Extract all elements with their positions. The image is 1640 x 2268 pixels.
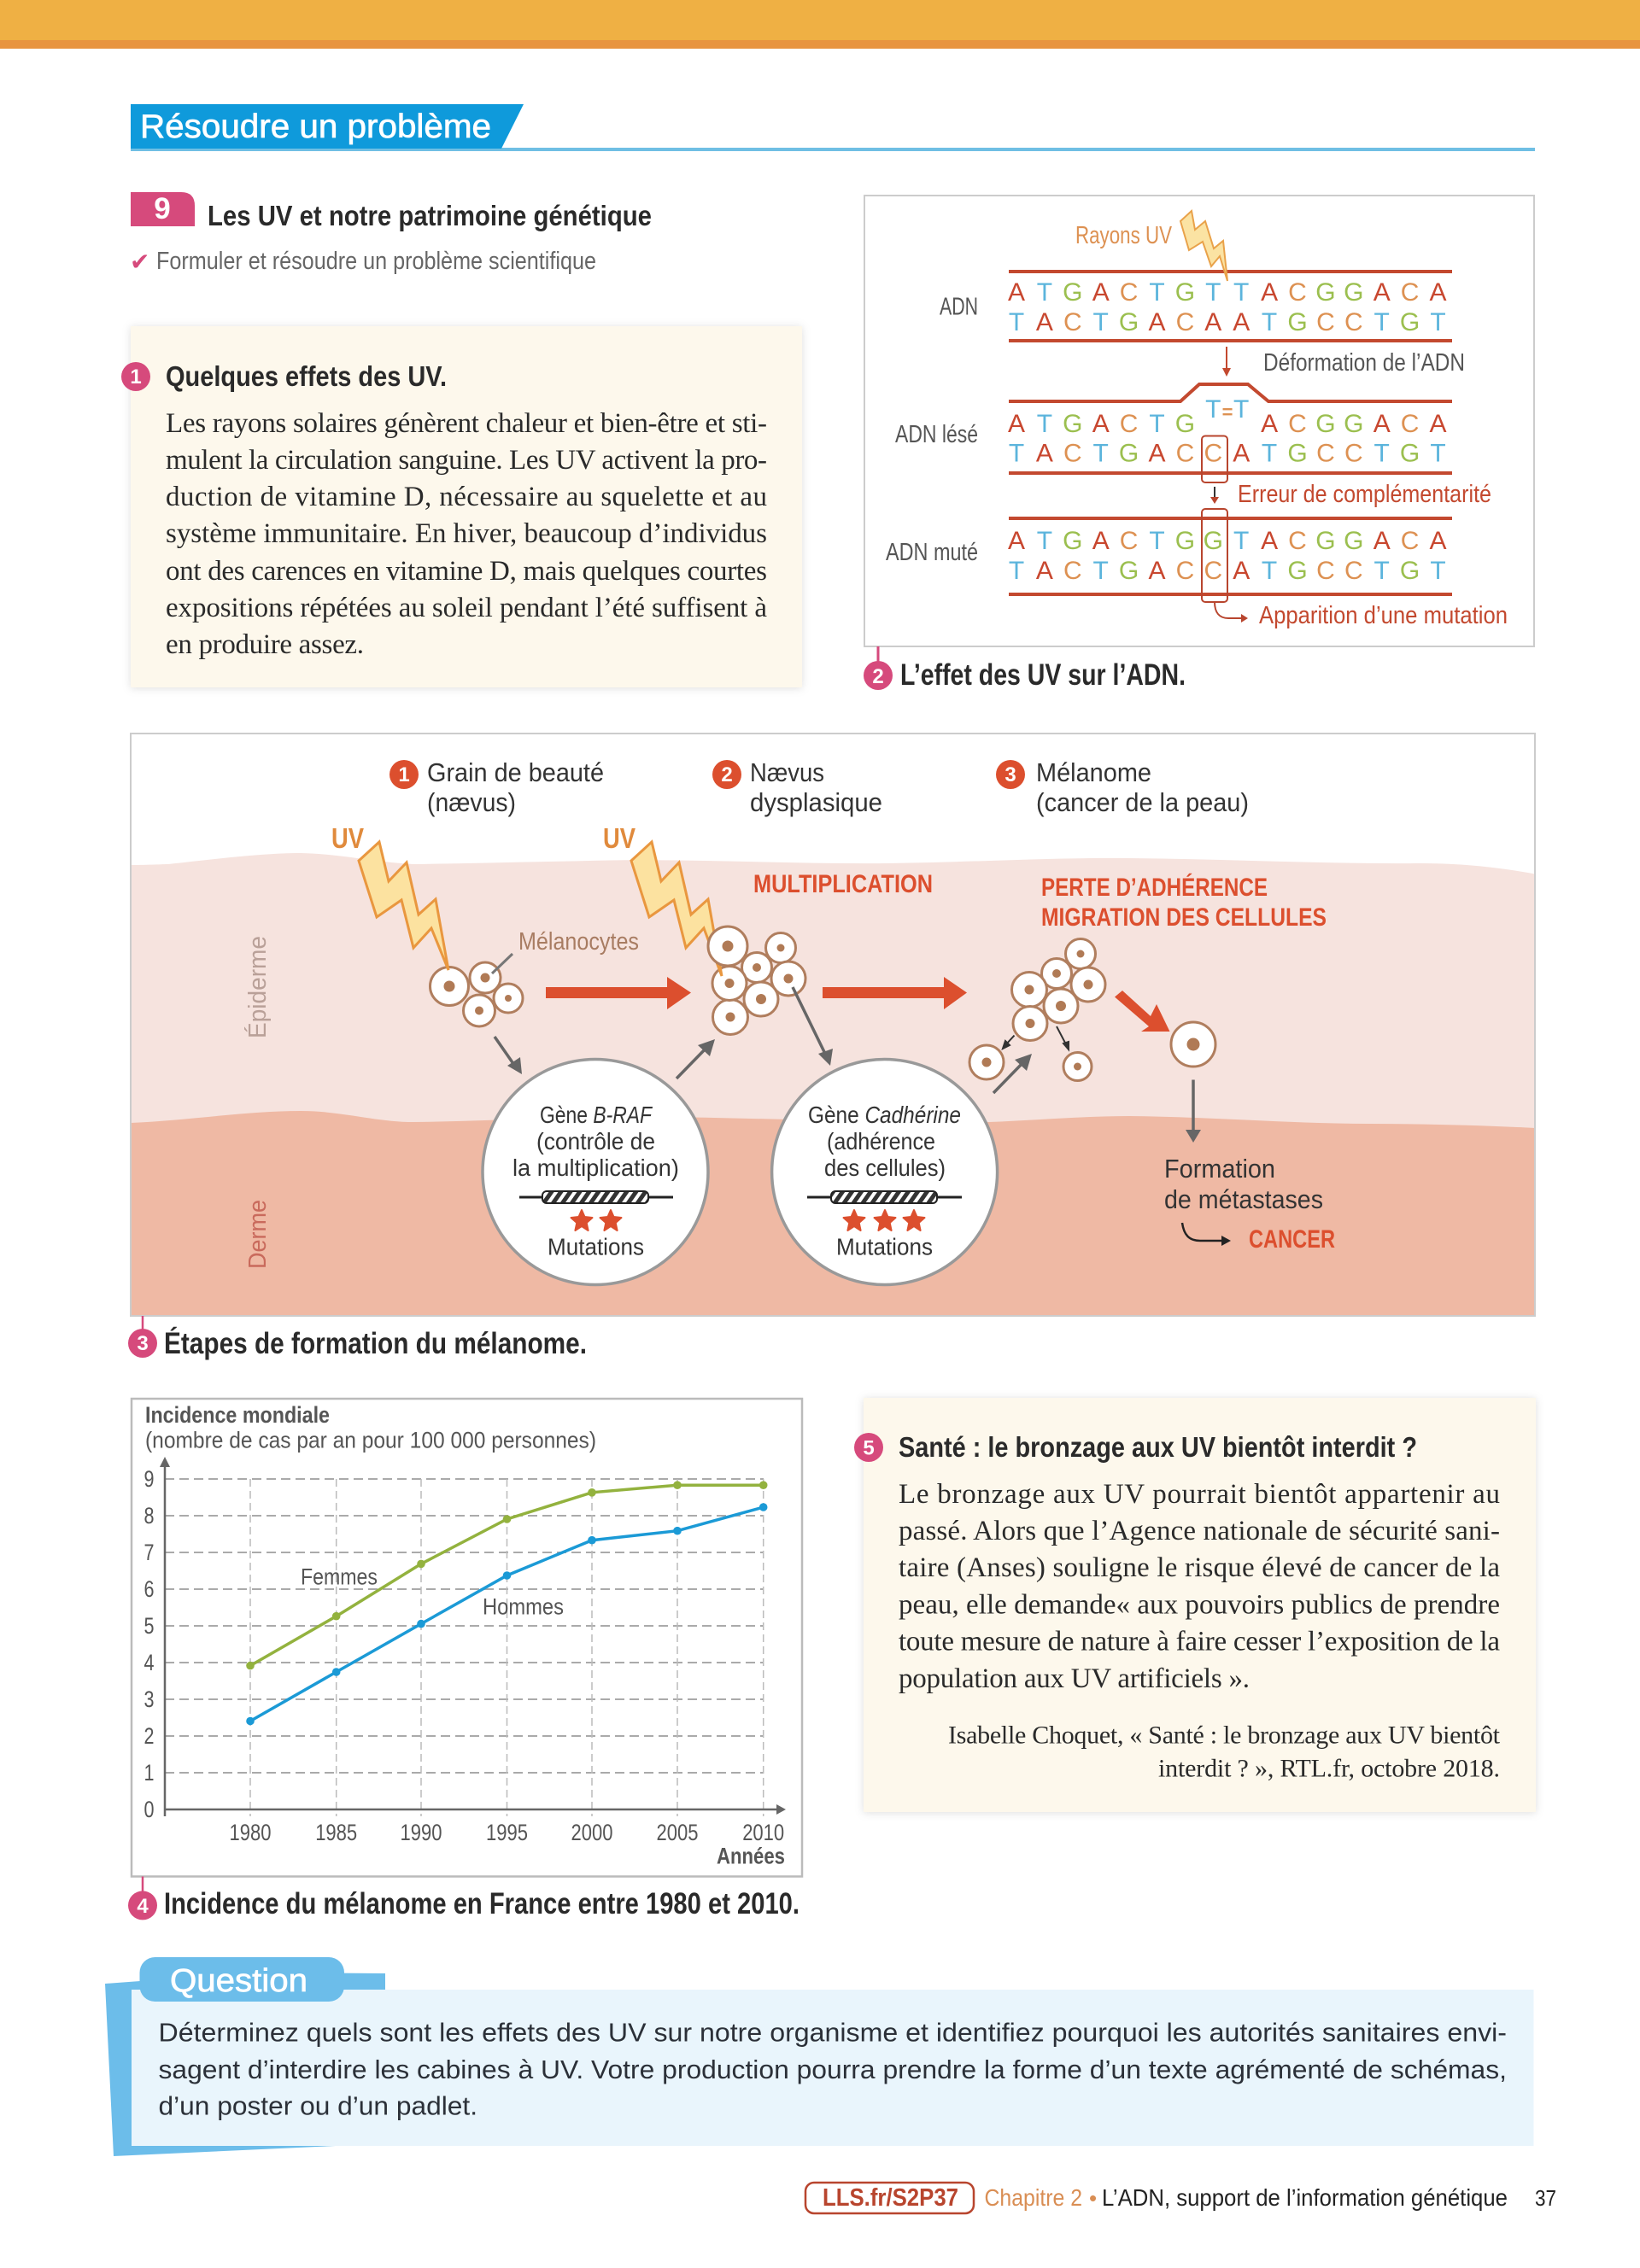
question text: sagent d’interdire les cabines à UV. Votre production pourra prendre la forme d’un texte agrémenté de schémas, — [159, 2055, 1507, 2084]
circle: gene B-RAF: (contrôle de — [536, 1128, 655, 1154]
top cell of cluster 2, in front of lightning — [708, 926, 747, 966]
sequence: ADN: A T G A C T G T T A C G G A C A — [1008, 278, 1447, 307]
label: ADN: ADN — [940, 294, 978, 321]
caption 4: 4 — [137, 1895, 149, 1918]
x axis labels: 1995 — [486, 1820, 528, 1845]
question text — [159, 2018, 1507, 2121]
section banner: Résoudre un problème — [131, 104, 1535, 151]
step 1 heading: (nævus) — [427, 787, 516, 817]
arrow: error — [1210, 487, 1219, 504]
circle: gene Cadhérine: (adhérence — [827, 1128, 935, 1154]
panel: document 5, santé: interdit ? », RTL.fr, octobre 2018. — [1158, 1754, 1500, 1783]
label: ADN muté: ADN muté — [886, 539, 978, 566]
panel: document 5, santé: Le bronzage aux UV pourrait bientôt appartenir au — [899, 1479, 1500, 1510]
circle: gene B-RAF: Mutations — [548, 1233, 644, 1260]
x axis labels: 1990 — [400, 1820, 442, 1845]
chart title: Incidence mondiale — [145, 1402, 330, 1428]
label: Formation de métastases — [1164, 1154, 1323, 1214]
caption 3: Étapes de formation du mélanome. — [164, 1326, 587, 1360]
panel: document 5, santé — [854, 1398, 1536, 1812]
panel: document 5, santé: Isabelle Choquet, « Santé : le bronzage aux UV bientôt — [948, 1721, 1501, 1749]
sequence: ADN lésé: A T G A C T G A C G G A C A — [1008, 410, 1447, 438]
exercise heading: ✔ — [130, 248, 149, 276]
y axis labels: 4 — [144, 1650, 154, 1675]
UV label 1: UV — [331, 822, 364, 854]
arrow: step 2 to 3 — [823, 977, 967, 1009]
panel: document 1, quelques effets des UV: 1 — [130, 365, 142, 389]
circle: gene B-RAF: la multiplication) — [512, 1154, 679, 1181]
label: Femmes: Femmes — [301, 1564, 378, 1590]
sequence: ADN lésé: T A C T G A C C A T G C C T G T — [1009, 440, 1446, 468]
step 2 heading: dysplasique — [750, 787, 882, 817]
panel: document 5, santé: population aux UV artificiels ». — [899, 1663, 1250, 1694]
caption 2: L’effet des UV sur l’ADN. — [900, 658, 1186, 692]
axes — [160, 1457, 786, 1816]
x axis title: Années: Années — [717, 1843, 785, 1868]
section banner: Résoudre un problème: Résoudre un problème — [140, 108, 491, 145]
panel: document 5, santé: toute mesure de nature à faire cesser l’exposition de la — [899, 1626, 1500, 1657]
panel: document 3, melanoma stages — [131, 734, 1535, 1316]
arrow: towards metastases — [1186, 1079, 1201, 1143]
panel: document 1, quelques effets des UV: ont des carences en vitamine D, mais quelques courtes — [166, 556, 767, 587]
panel: document 2, effet des UV sur l'ADN — [864, 196, 1534, 646]
label: Rayons UV: Rayons UV — [1075, 222, 1173, 249]
pointer: Mélanocytes — [492, 954, 512, 973]
skin layer: dermis — [131, 1111, 1535, 1316]
caption 3: 3 — [137, 1332, 149, 1355]
panel: document 5, santé: 5 — [863, 1436, 875, 1460]
panel: document 1, quelques effets des UV: système immunitaire. En hiver, beaucoup d’individus — [166, 518, 767, 549]
label: Épiderme: Épiderme — [243, 936, 272, 1038]
circle: gene Cadhérine: Gène Cadhérine — [808, 1102, 961, 1128]
y axis labels: 8 — [144, 1503, 154, 1529]
caption 3 — [128, 1316, 587, 1360]
panel: document 1, quelques effets des UV: duction de vitamine D, nécessaire au squelette et au — [166, 482, 767, 512]
circle: gene Cadhérine — [772, 1059, 998, 1284]
label: perte d'adhérence, migration — [1041, 873, 1327, 932]
arrow: mutation — [1215, 602, 1248, 623]
arrow: gene B-RAF to cluster — [676, 1039, 715, 1078]
panel: document 1, quelques effets des UV: Les rayons solaires génèrent chaleur et bien-être et sti- — [166, 408, 767, 439]
footer: L’ADN, support de l’information génétique — [1102, 2184, 1508, 2211]
icon: small lightning — [1180, 211, 1227, 281]
step 2 heading: Nævus — [750, 757, 824, 787]
question text: d’un poster ou d’un padlet. — [159, 2091, 477, 2121]
x axis labels: 1985 — [315, 1820, 357, 1845]
panel: document 5, santé: peau, elle demande« aux pouvoirs publics de prendre — [899, 1590, 1500, 1621]
footer: 37 — [1535, 2185, 1556, 2211]
step 3 heading: (cancer de la peau) — [1036, 787, 1249, 817]
circle: gene Cadhérine: Mutations — [836, 1233, 933, 1260]
highlight box: complementarity error — [1202, 435, 1227, 482]
cell cluster 3 — [969, 939, 1105, 1081]
cell cluster 1 — [430, 962, 523, 1026]
backing shape — [105, 1973, 385, 2156]
step 3 heading: Mélanome — [1036, 757, 1151, 787]
icon: lightning 1 — [359, 842, 448, 970]
tab: Question — [140, 1957, 344, 2002]
label: perte d'adhérence, migration: MIGRATION DES CELLULES — [1041, 903, 1327, 932]
footer: • — [1089, 2185, 1097, 2211]
footer — [805, 2183, 1556, 2213]
x axis labels: 2000 — [571, 1820, 613, 1845]
strands: ADN muté — [1009, 518, 1452, 594]
panel: document 1, quelques effets des UV: mulent la circulation sanguine. Les UV activent la pro- — [166, 445, 767, 476]
series: Femmes — [246, 1481, 767, 1669]
y axis labels: 7 — [144, 1540, 154, 1565]
caption 2 — [864, 646, 1186, 692]
sequence: ADN lésé — [1008, 395, 1447, 468]
label: ADN lésé: ADN lésé — [895, 421, 978, 448]
arrow: gene Cadhérine to cluster — [993, 1054, 1032, 1093]
exercise heading: Les UV et notre patrimoine génétique — [208, 200, 652, 231]
label: Hommes: Hommes — [483, 1594, 564, 1620]
UV label 2: UV — [603, 822, 636, 854]
label: Erreur de complémentarité: Erreur de complémentarité — [1238, 481, 1491, 508]
y axis labels: 3 — [144, 1686, 154, 1712]
cell cluster 2 — [712, 932, 805, 1035]
sequence: ADN — [1008, 278, 1447, 336]
label: Formation de métastases: de métastases — [1164, 1184, 1323, 1214]
chart title: (nombre de cas par an pour 100 000 personnes) — [145, 1428, 596, 1453]
panel: document 1, quelques effets des UV — [121, 326, 802, 687]
arrow: step 1 to 2 — [546, 977, 691, 1009]
label: Déformation de l'ADN: Déformation de l’ADN — [1263, 349, 1465, 377]
y axis labels — [144, 1466, 154, 1822]
y axis labels: 0 — [144, 1797, 154, 1822]
strands: ADN lésé — [1009, 384, 1452, 473]
step 3 heading: 3 — [1004, 763, 1016, 786]
skin layer: epidermis — [131, 853, 1535, 1316]
icon: lightning 2 — [631, 842, 722, 976]
arrow: to cancer — [1182, 1223, 1231, 1246]
caption 2: 2 — [872, 665, 884, 688]
label: Formation de métastases: Formation — [1164, 1154, 1275, 1184]
x axis labels: 1980 — [229, 1820, 272, 1845]
panel: document 4, incidence chart — [132, 1399, 802, 1877]
panel: question — [105, 1957, 1534, 2156]
migrating cell — [1171, 1022, 1215, 1067]
tab: Question: Question — [170, 1963, 308, 1999]
panel: document 5, santé: passé. Alors que l’Agence nationale de sécurité sani- — [899, 1516, 1500, 1546]
panel: document 1, quelques effets des UV: Quelques effets des UV. — [166, 360, 447, 392]
sequence: ADN muté — [1008, 527, 1447, 585]
panel: document 5, santé: Santé : le bronzage aux UV bientôt interdit ? — [899, 1431, 1417, 1463]
y axis labels: 5 — [144, 1613, 154, 1639]
sequence: ADN muté: A T G A C T G G T A C G G A C A — [1008, 527, 1447, 555]
arrow: deformation — [1222, 347, 1231, 377]
x axis labels: 2010 — [742, 1820, 784, 1845]
exercise heading: 9 — [154, 192, 171, 225]
label: MULTIPLICATION: MULTIPLICATION — [753, 870, 933, 898]
chart title — [145, 1402, 596, 1453]
label: Mélanocytes: Mélanocytes — [518, 928, 639, 956]
circle: gene B-RAF: Gène B-RAF — [540, 1102, 653, 1128]
exercise heading — [130, 192, 652, 276]
caption 4: Incidence du mélanome en France entre 1980 et 2010. — [164, 1887, 800, 1920]
sequence: ADN: T A C T G A C A A T G C C T G T — [1009, 308, 1446, 336]
caption 4 — [128, 1877, 800, 1920]
sequence: ADN muté: T A C T G A C C A T G C C T G T — [1009, 557, 1446, 585]
step 2 heading — [712, 757, 882, 817]
panel: document 1, quelques effets des UV: en produire assez. — [166, 629, 364, 660]
label: Apparition d'une mutation: Apparition d’une mutation — [1259, 602, 1508, 629]
y axis labels: 9 — [144, 1466, 154, 1492]
label: CANCER: CANCER — [1249, 1225, 1335, 1254]
arrow: cluster to gene B-RAF — [495, 1037, 522, 1074]
arrow: cluster to gene Cadhérine — [793, 987, 833, 1066]
circle: gene B-RAF — [483, 1059, 708, 1284]
step 2 heading: 2 — [721, 763, 733, 786]
footer: LLS.fr/S2P37 — [823, 2184, 958, 2212]
panel: document 1, quelques effets des UV: expositions répétées au soleil pendant l’été suffisent à — [166, 593, 767, 623]
small arrows: migrating cells — [1003, 1026, 1069, 1049]
step 1 heading — [390, 757, 604, 817]
exercise heading: Formuler et résoudre un problème scientifique — [156, 248, 596, 275]
label: perte d'adhérence, migration: PERTE D’ADHÉRENCE — [1041, 873, 1268, 902]
y axis labels: 1 — [144, 1760, 154, 1786]
question text: Déterminez quels sont les effets des UV sur notre organisme et identifiez pourquoi les autorités sanitaires envi- — [159, 2018, 1507, 2048]
strands: ADN — [1009, 272, 1452, 341]
panel: document 5, santé: taire (Anses) souligne le risque élevé de cancer de la — [899, 1552, 1500, 1583]
label: Derme: Derme — [244, 1200, 272, 1269]
x axis labels — [229, 1820, 784, 1845]
sequence: ADN lésé: = — [1222, 401, 1233, 423]
top colour band — [0, 0, 1640, 49]
series: Hommes — [246, 1503, 767, 1725]
y axis labels: 6 — [144, 1576, 154, 1602]
footer: Chapitre 2 — [984, 2184, 1082, 2211]
highlight box: mutation — [1202, 509, 1227, 602]
arrow: detaching cell — [1115, 991, 1170, 1032]
x axis labels: 2005 — [656, 1820, 699, 1845]
sequence: ADN lésé: T T — [1205, 395, 1249, 424]
step 3 heading — [996, 757, 1249, 817]
y axis labels: 2 — [144, 1723, 154, 1749]
circle: gene Cadhérine: des cellules) — [824, 1154, 946, 1181]
step 1 heading: Grain de beauté — [427, 757, 604, 787]
step 1 heading: 1 — [398, 763, 410, 786]
